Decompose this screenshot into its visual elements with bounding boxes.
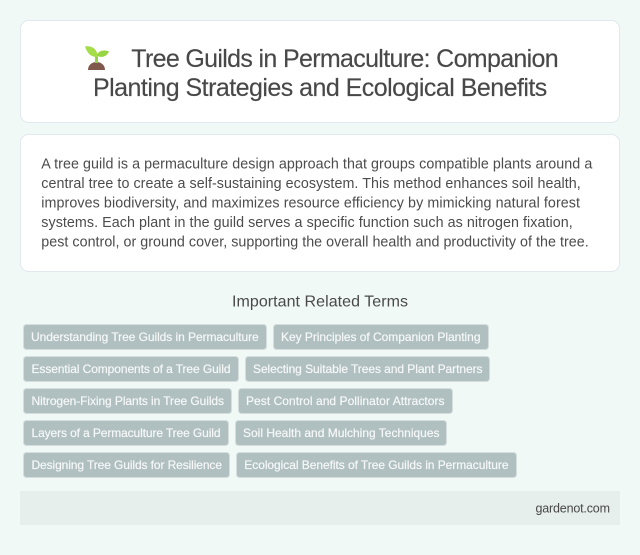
text block: description — [41, 156, 592, 250]
text block: description: A tree guild is a permaculture design approach that groups compatible plants around a — [41, 156, 592, 172]
text block: description: improves biodiversity, and maximizes resource efficiency by mimicking natural forest — [41, 195, 580, 211]
footer source text: gardenot.com — [536, 501, 610, 515]
icon: seedling — [85, 46, 109, 70]
panel: description card — [20, 134, 620, 272]
heading: related terms: Important Related Terms — [232, 294, 408, 311]
tag: ecological benefits: Ecological Benefits of Tree Guilds in Permaculture — [244, 458, 509, 472]
tag: pest control — [238, 388, 452, 414]
tag: soil health — [236, 420, 446, 446]
tag: selecting trees — [246, 356, 490, 382]
title: Planting Strategies and Ecological Benefits — [93, 74, 547, 102]
title — [93, 45, 559, 102]
tag: key principles — [274, 324, 488, 350]
footer bar — [20, 491, 620, 525]
tag: essential components — [24, 356, 238, 382]
text block: description: pest control, or ground cover, supporting the overall health and productivity of the tree. — [41, 234, 589, 250]
text block: description: systems. Each plant in the guild serves a specific function such as nitrogen fixation, — [41, 215, 573, 231]
tag: soil health: Soil Health and Mulching Techniques — [243, 426, 440, 440]
tag: designing for resilience — [24, 452, 230, 478]
tag: designing for resilience: Designing Tree Guilds for Resilience — [32, 458, 222, 472]
tag: layers — [24, 420, 228, 446]
tag: understanding tree guilds — [24, 324, 266, 350]
tag: nitrogen-fixing plants — [24, 388, 232, 414]
tag: nitrogen-fixing plants: Nitrogen-Fixing Plants in Tree Guilds — [32, 394, 224, 408]
tag: understanding tree guilds: Understanding Tree Guilds in Permaculture — [31, 330, 259, 344]
tag: essential components: Essential Components of a Tree Guild — [32, 362, 230, 376]
title: Tree Guilds in Permaculture: Companion — [131, 45, 559, 73]
text block: description: central tree to create a self-sustaining ecosystem. This method enhances soil health, — [41, 176, 581, 192]
tag list — [24, 324, 516, 478]
tag: pest control: Pest Control and Pollinator Attractors — [246, 394, 444, 408]
tag: key principles: Key Principles of Companion Planting — [281, 330, 480, 344]
panel: header card — [20, 20, 620, 122]
tag: ecological benefits — [236, 452, 516, 478]
tag: layers: Layers of a Permaculture Tree Guild — [32, 426, 220, 440]
tag: selecting trees: Selecting Suitable Trees and Plant Partners — [253, 362, 482, 376]
